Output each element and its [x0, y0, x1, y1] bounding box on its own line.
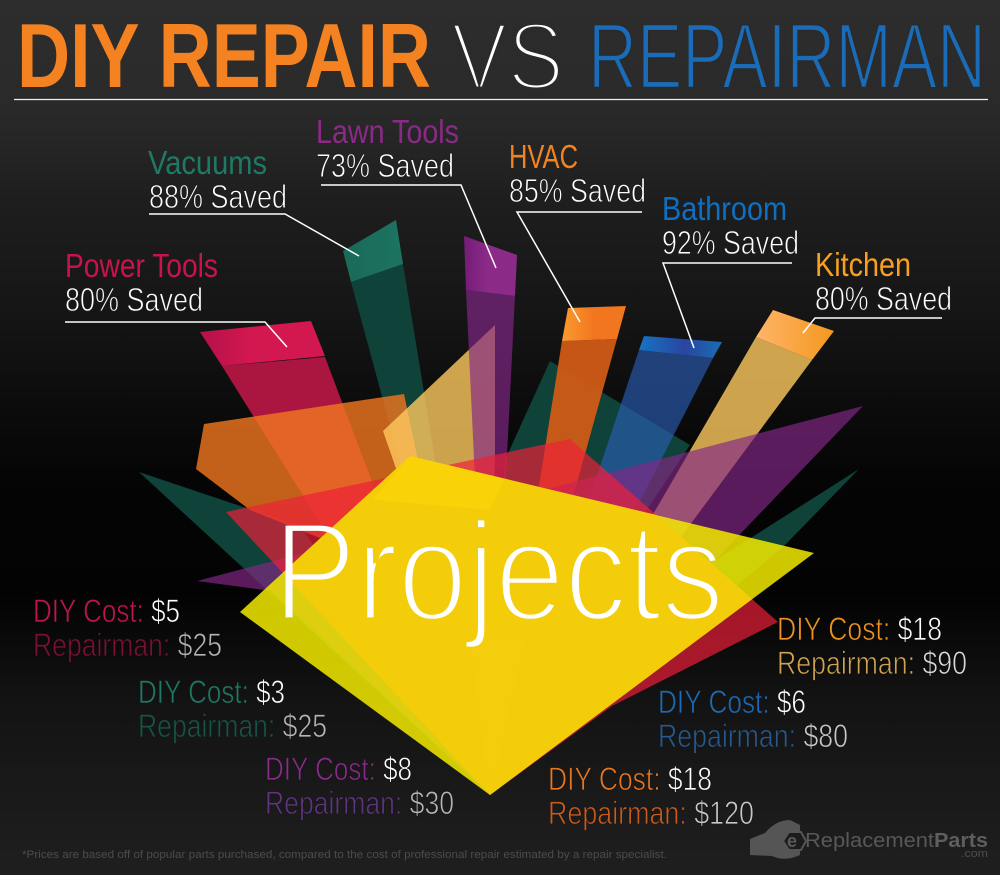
shape: yellow diamond [240, 456, 814, 795]
label: vacuums: 88% Saved [149, 178, 287, 215]
logo text: Replacement [805, 830, 934, 852]
icon: wrench [750, 820, 800, 859]
shape: gold [383, 325, 495, 795]
costs: lawn tools: Repairman: $30 [265, 785, 454, 821]
costs: bathroom: Repairman: $80 [658, 718, 848, 754]
label: vacuums: Vacuums [148, 144, 267, 181]
costs: HVAC: Repairman: $120 [548, 795, 754, 831]
label: power tools: 80% Saved [65, 281, 203, 318]
costs: HVAC: DIY Cost: $18 [548, 761, 712, 797]
ray: right teal [490, 469, 859, 795]
ray: purple [197, 406, 863, 795]
label: bathroom: Bathroom [662, 190, 787, 227]
costs: vacuums [138, 674, 327, 744]
label: vacuums [148, 144, 359, 256]
label: lawn tools: Lawn Tools [316, 113, 459, 150]
costs: kitchen: Repairman: $90 [777, 645, 967, 681]
shape: orange [196, 394, 440, 560]
logo .com: .com [961, 848, 988, 860]
bar: HVAC [490, 306, 626, 795]
label: power tools: Power Tools [65, 247, 218, 284]
costs: kitchen: DIY Cost: $18 [777, 611, 942, 647]
costs: vacuums: Repairman: $25 [138, 708, 327, 744]
bar: bathroom [490, 336, 722, 795]
logo e: e [787, 831, 797, 851]
logo: eReplacementParts [750, 820, 988, 860]
costs: vacuums: DIY Cost: $3 [138, 674, 285, 710]
bar: vacuums [343, 220, 490, 795]
costs: lawn tools [265, 751, 454, 821]
bar: kitchen [490, 310, 834, 795]
label: kitchen: 80% Saved [815, 280, 952, 317]
costs: lawn tools: DIY Cost: $8 [265, 751, 412, 787]
ray: left teal [139, 472, 490, 795]
label: power tools [65, 247, 287, 347]
label: kitchen [803, 246, 952, 333]
label: HVAC [509, 138, 646, 322]
chart: radiating project rays [139, 220, 863, 795]
bar: lawn tools [464, 236, 517, 795]
shape: red [226, 439, 778, 795]
costs: bathroom: DIY Cost: $6 [658, 684, 806, 720]
logo text bold: Parts [934, 830, 988, 852]
title: VS: VS [451, 3, 564, 110]
title [17, 3, 986, 110]
heading: Projects: Projects [273, 492, 724, 650]
title: DIY Repair: DIY REPAIR [17, 6, 431, 107]
label: lawn tools: 73% Saved [316, 147, 454, 184]
footnote: *Prices are based off of popular parts purchased, compared to the cost of professional repair estimated by a repair specialist. [22, 849, 667, 861]
icon: hexagon nut [783, 832, 806, 850]
costs: HVAC [548, 761, 754, 831]
label: HVAC: HVAC [509, 138, 578, 175]
bar: power tools [200, 321, 490, 795]
ray: center teal [490, 361, 690, 795]
label: HVAC: 85% Saved [509, 172, 646, 209]
label: kitchen: Kitchen [815, 246, 911, 283]
label: bathroom: 92% Saved [662, 224, 799, 261]
label: bathroom [662, 190, 799, 348]
costs: kitchen [777, 611, 967, 681]
costs: bathroom [658, 684, 848, 754]
costs: power tools: Repairman: $25 [33, 627, 222, 663]
label: lawn tools [316, 113, 496, 268]
costs: power tools [33, 593, 222, 663]
costs: power tools: DIY Cost: $5 [33, 593, 180, 629]
